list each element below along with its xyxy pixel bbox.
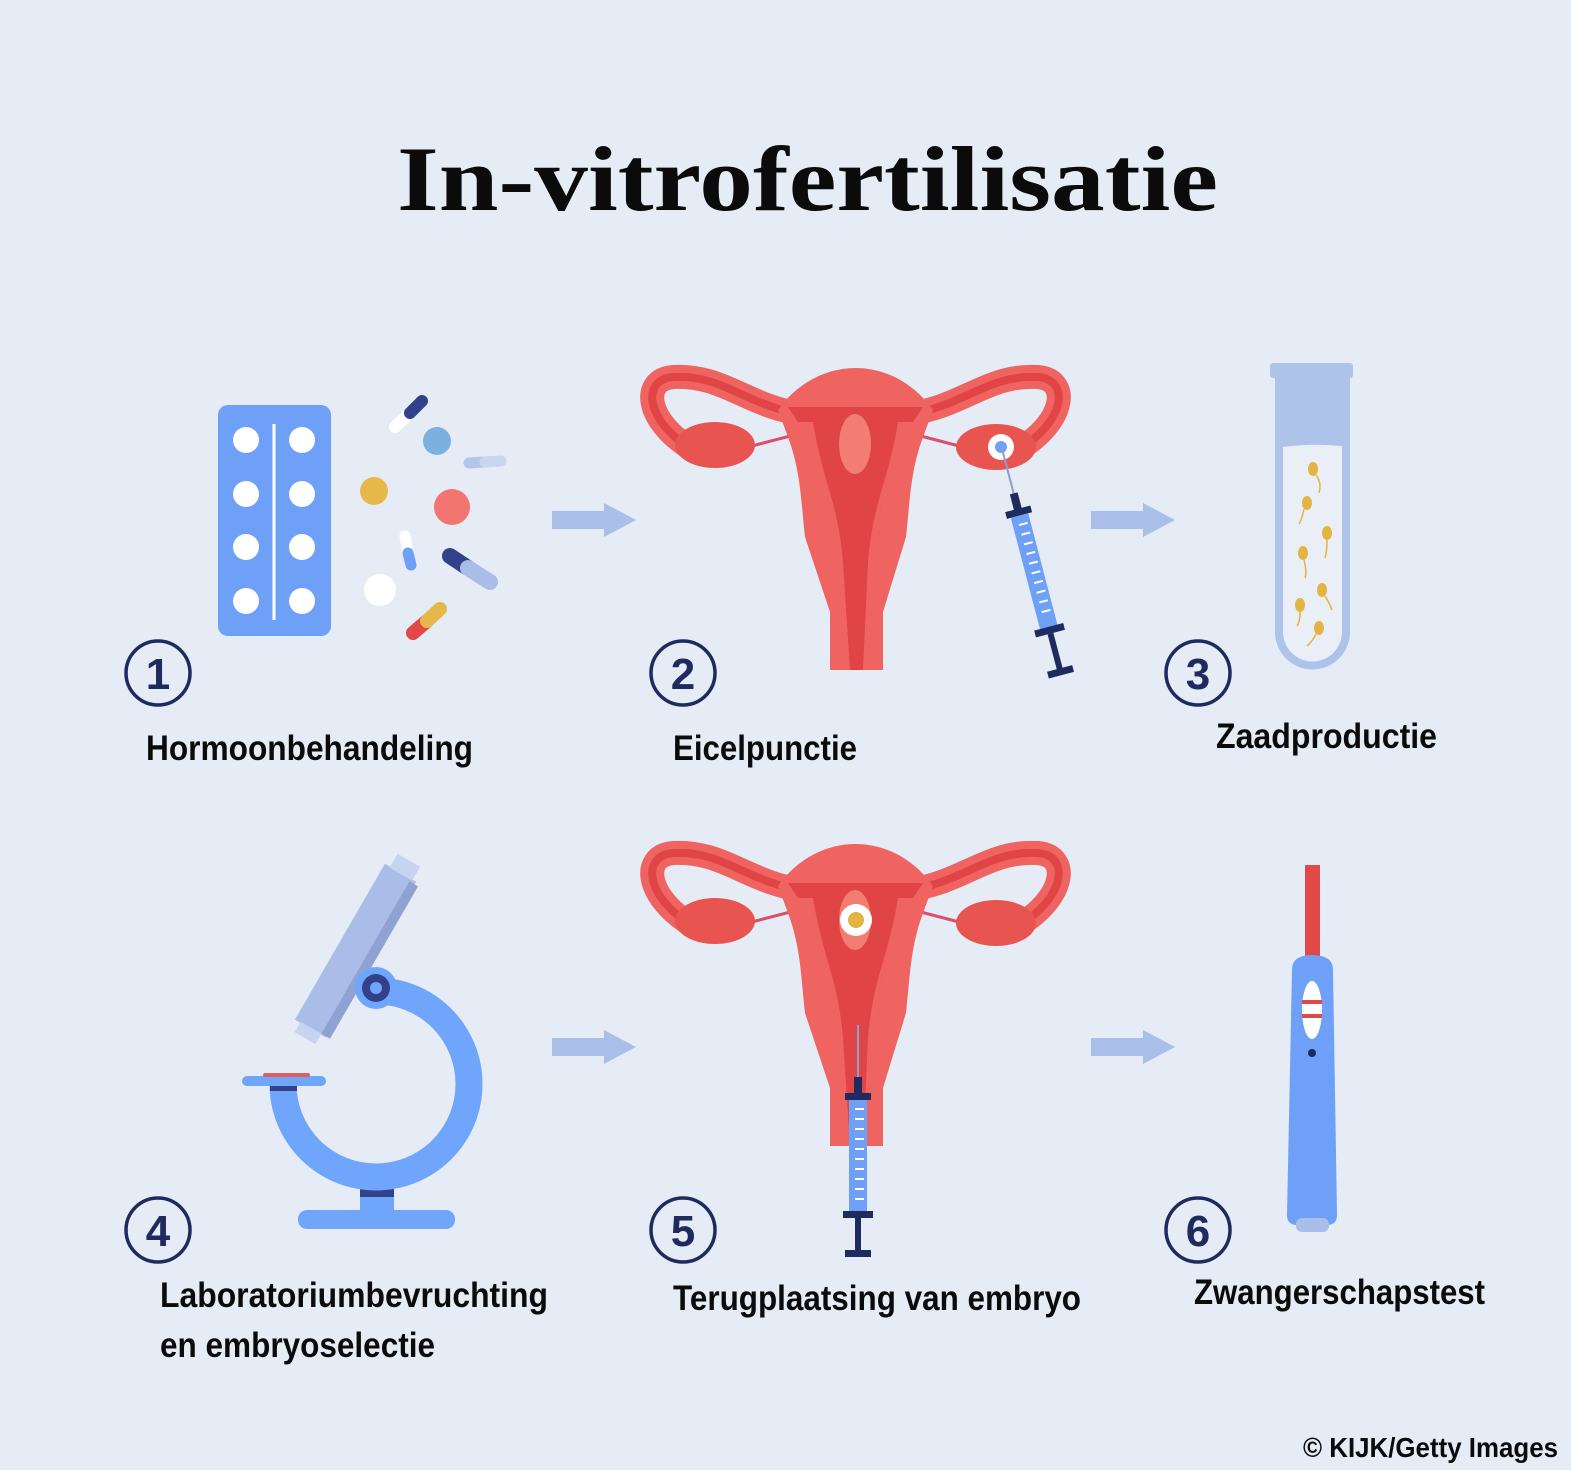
labels: Eicelpunctie: [673, 729, 857, 768]
arrow 4: [1091, 1030, 1175, 1064]
labels: Terugplaatsing van embryo: [673, 1279, 1081, 1318]
labels: [146, 717, 1485, 1365]
icon: uterus with egg retrieval: [652, 368, 1059, 670]
arrow 3: [552, 1030, 636, 1064]
icon: syringe step 2: [986, 441, 1076, 679]
labels: Zaadproductie: [1216, 717, 1437, 756]
step numbers: 3: [1186, 650, 1210, 699]
arrow 1: [552, 503, 636, 537]
credit: © KIJK/Getty Images: [1303, 1432, 1558, 1463]
icon: syringe step 5: [843, 1025, 873, 1257]
arrow 2: [1091, 503, 1175, 537]
title: In-vitrofertilisatie: [397, 128, 1218, 230]
icon: test tube with sperm: [1270, 363, 1353, 670]
step numbers: 6: [1186, 1207, 1210, 1256]
step numbers: 1: [146, 650, 170, 699]
labels: en embryoselectie: [160, 1326, 435, 1365]
step numbers: [146, 650, 1210, 1256]
icon: pills: [218, 401, 501, 636]
labels: Zwangerschapstest: [1194, 1273, 1485, 1312]
step number circles: [126, 641, 1230, 1262]
icon: pregnancy test: [1287, 865, 1337, 1232]
labels: Laboratoriumbevruchting: [160, 1276, 548, 1315]
icon: uterus with embryo transfer: [652, 844, 1059, 1146]
icon: microscope: [242, 851, 469, 1229]
step numbers: 2: [671, 650, 695, 699]
step numbers: 4: [146, 1207, 171, 1256]
step numbers: 5: [671, 1207, 695, 1256]
labels: Hormoonbehandeling: [146, 729, 473, 768]
